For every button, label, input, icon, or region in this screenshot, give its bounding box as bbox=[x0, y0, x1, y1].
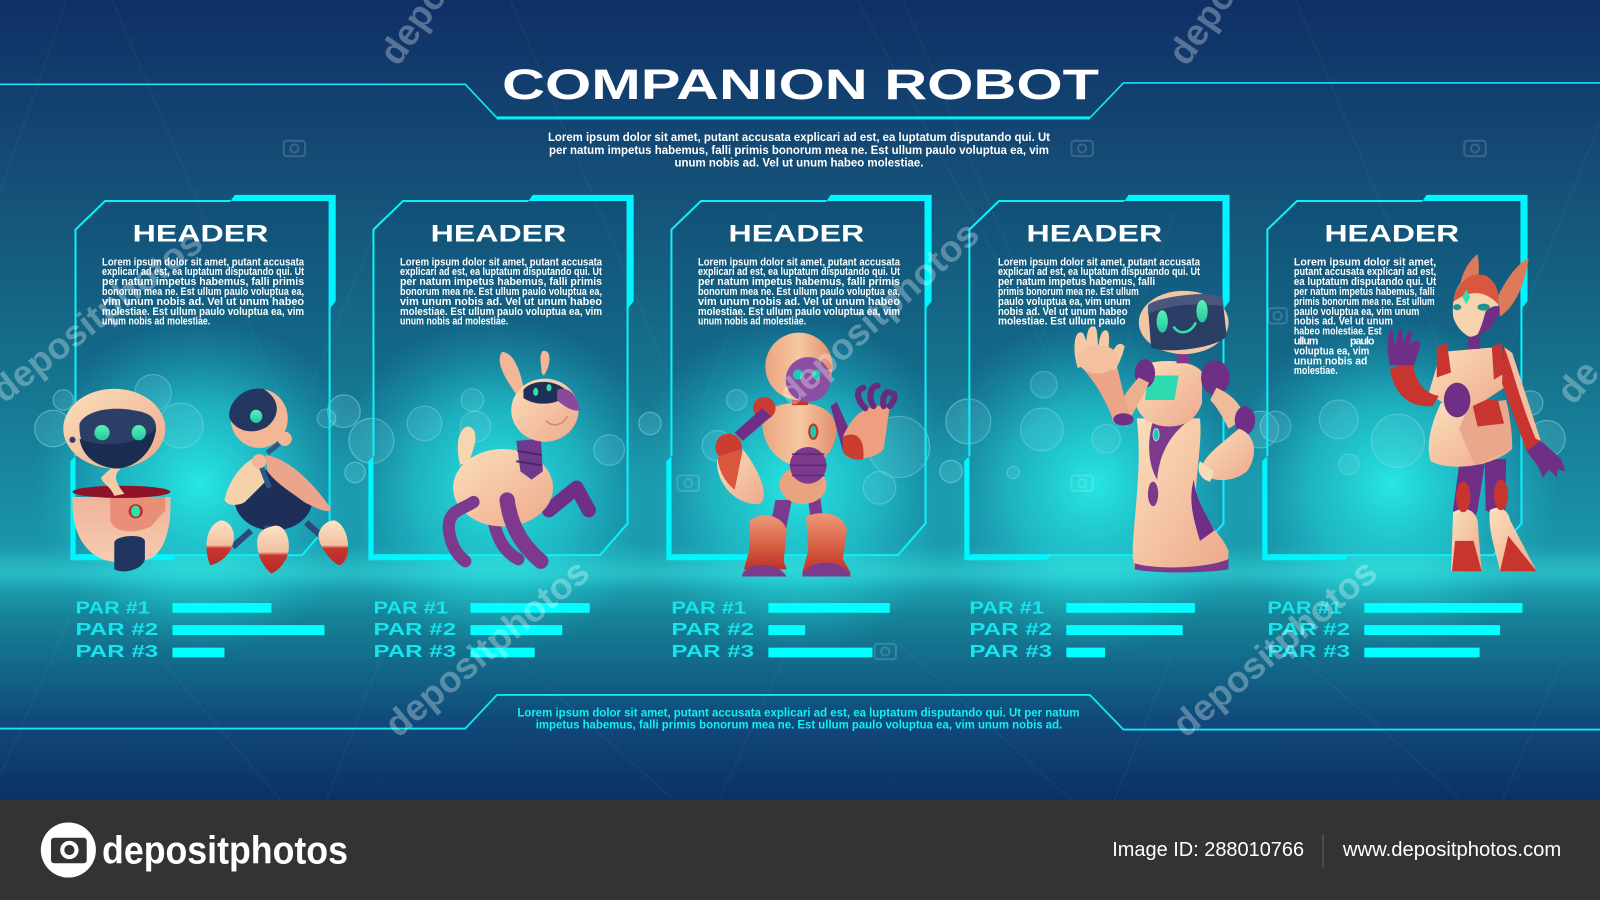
intro text: per natum impetus habemus, falli primis bonorum mea ne. Est ullum paulo voluptua ea, vim bbox=[549, 143, 1049, 157]
parameters 2: PAR #2 bbox=[373, 619, 456, 639]
bottom note bbox=[517, 705, 1080, 732]
bottom note: Lorem ipsum dolor sit amet, putant accusata explicari ad est, ea luptatum disputando qui. Ut per natum bbox=[517, 705, 1080, 719]
panel 2 text: explicari ad est, ea luptatum disputando qui. Ut bbox=[400, 266, 602, 278]
watermark camera icons bbox=[284, 141, 1486, 659]
panel 4 text: nobis ad. Vel ut unum habeo bbox=[998, 306, 1128, 318]
parameters 4 bbox=[969, 597, 1195, 661]
top frame line bbox=[0, 83, 1600, 118]
footer band bbox=[0, 800, 1600, 900]
robot 4: humanoid bbox=[715, 333, 895, 577]
panel 5 text: ea luptatum disputando qui. Ut bbox=[1294, 276, 1437, 288]
panel 5 heading: HEADER bbox=[1324, 220, 1460, 247]
panel 5 text: per natum impetus habemus, falli bbox=[1294, 286, 1435, 298]
bottom note: impetus habemus, falli primis bonorum mea ne. Est ullum paulo voluptua ea, vim unum nobis ad. bbox=[536, 718, 1062, 732]
panel 2 heading: HEADER bbox=[431, 220, 567, 247]
parameters 1 bbox=[76, 597, 324, 661]
parameters 2: PAR #3 bbox=[373, 641, 457, 661]
panel 2 text: per natum impetus habemus, falli primis bbox=[400, 276, 602, 288]
bottom frame line bbox=[0, 695, 1600, 730]
panel 1 text: Lorem ipsum dolor sit amet, putant accusata bbox=[102, 256, 304, 268]
panel 4 text bbox=[998, 256, 1200, 328]
panel 4 bbox=[964, 195, 1230, 560]
panel 5 bbox=[1262, 195, 1528, 560]
parameters 4: PAR #3 bbox=[969, 641, 1053, 661]
panel 3 bbox=[666, 195, 932, 560]
panel 4 heading: HEADER bbox=[1027, 220, 1163, 247]
website: www.depositphotos.com bbox=[1342, 839, 1561, 861]
parameters 3: PAR #2 bbox=[671, 619, 754, 639]
parameters 5: PAR #2 bbox=[1267, 619, 1350, 639]
panel 3 text bbox=[698, 256, 901, 328]
panel 2 text: molestiae. Est ullum paulo voluptua ea, vim bbox=[400, 306, 602, 318]
parameters 5: PAR #3 bbox=[1267, 641, 1350, 661]
intro text: Lorem ipsum dolor sit amet, putant accusata explicari ad est, ea luptatum disputando qui. Ut bbox=[548, 130, 1050, 144]
parameters 3: PAR #1 bbox=[671, 597, 746, 617]
parameters 2 bbox=[373, 597, 590, 661]
intro text: unum nobis ad. Vel ut unum habeo molestiae. bbox=[674, 155, 923, 169]
panel 4 text: explicari ad est, ea luptatum disputando qui. Ut bbox=[998, 266, 1200, 278]
panel 1 text: unum nobis ad molestiae. bbox=[102, 316, 210, 328]
parameters 5 bbox=[1267, 597, 1522, 661]
panel 3 text: molestiae. Est ullum paulo voluptua ea, vim bbox=[698, 306, 900, 318]
panel 4 text: molestiae. Est ullum paulo bbox=[998, 316, 1126, 328]
parameters 3 bbox=[671, 597, 890, 661]
watermarks: depositphotos bbox=[1165, 551, 1385, 745]
panel 5 text: putant accusata explicari ad est, bbox=[1294, 266, 1436, 278]
title: COMPANION ROBOT bbox=[502, 61, 1099, 109]
panel 2 text: Lorem ipsum dolor sit amet, putant accusata bbox=[400, 256, 602, 268]
panel 1 text: per natum impetus habemus, falli primis bbox=[102, 276, 304, 288]
panel 2 text bbox=[400, 256, 603, 328]
parameters 1: PAR #2 bbox=[76, 619, 158, 639]
panel 1 text: vim unum nobis ad. Vel ut unum habeo bbox=[102, 296, 305, 308]
footer logo icon bbox=[41, 822, 96, 878]
panel 5 text: Lorem ipsum dolor sit amet, bbox=[1294, 256, 1436, 268]
robot 3: dog bbox=[449, 351, 589, 561]
watermarks: depositphotos bbox=[377, 551, 597, 745]
robot 1: ball head on pot bbox=[63, 389, 171, 571]
panel 5 text bbox=[1294, 256, 1437, 377]
parameters 2: PAR #1 bbox=[373, 597, 448, 617]
panel 5 text: nobis ad. Vel ut unum bbox=[1294, 316, 1393, 328]
panel 3 heading: HEADER bbox=[729, 220, 865, 247]
robot 5: screen-face android bbox=[1076, 291, 1255, 572]
panel 1 text: explicari ad est, ea luptatum disputando qui. Ut bbox=[102, 266, 304, 278]
panel 3 text: per natum impetus habemus, falli primis bbox=[698, 276, 900, 288]
robot 6: feline android bbox=[1388, 254, 1565, 571]
panel 1 text bbox=[102, 256, 305, 328]
parameters 1: PAR #3 bbox=[76, 641, 159, 661]
panel 3 text: unum nobis ad molestiae. bbox=[698, 316, 806, 328]
panel 5 text: voluptua ea, vim bbox=[1294, 345, 1369, 357]
panel 3 text: explicari ad est, ea luptatum disputando qui. Ut bbox=[698, 266, 900, 278]
panel 4 text: paulo voluptua ea, vim unum bbox=[998, 296, 1131, 308]
parameters 5: PAR #1 bbox=[1267, 597, 1342, 617]
panel 4 text: primis bonorum mea ne. Est ullum bbox=[998, 286, 1139, 298]
panel 3 text: bonorum mea ne. Est ullum paulo voluptua ea, bbox=[698, 286, 900, 298]
panel 1 bbox=[70, 195, 336, 560]
image id: Image ID: 288010766 bbox=[1112, 839, 1304, 861]
panel 4 text: Lorem ipsum dolor sit amet, putant accusata bbox=[998, 256, 1200, 268]
panel 2 bbox=[368, 195, 634, 560]
intro text bbox=[548, 130, 1050, 169]
bubbles bbox=[35, 371, 1565, 504]
panel 5 text: ullum paulo bbox=[1294, 335, 1375, 347]
panel 2 text: bonorum mea ne. Est ullum paulo voluptua ea, bbox=[400, 286, 602, 298]
watermarks: depositphotos bbox=[770, 213, 987, 414]
panel 5 text: paulo voluptua ea, vim unum bbox=[1294, 306, 1419, 318]
footer brand: depositphotos bbox=[102, 829, 348, 872]
panel 5 text: molestiae. bbox=[1294, 365, 1338, 377]
parameters 4: PAR #1 bbox=[969, 597, 1044, 617]
panel 3 text: Lorem ipsum dolor sit amet, putant accusata bbox=[698, 256, 900, 268]
panel 4 text: per natum impetus habemus, falli bbox=[998, 276, 1155, 288]
panel 5 text: unum nobis ad bbox=[1294, 355, 1367, 367]
panel 1 text: bonorum mea ne. Est ullum paulo voluptua ea, bbox=[102, 286, 304, 298]
parameters 4: PAR #2 bbox=[969, 619, 1052, 639]
panel 2 text: unum nobis ad molestiae. bbox=[400, 316, 508, 328]
panel 3 text: vim unum nobis ad. Vel ut unum habeo bbox=[698, 296, 901, 308]
parameters 3: PAR #3 bbox=[671, 641, 755, 661]
panel 1 heading: HEADER bbox=[133, 220, 269, 247]
panel 2 text: vim unum nobis ad. Vel ut unum habeo bbox=[400, 296, 603, 308]
panel 5 text: primis bonorum mea ne. Est ullum bbox=[1294, 296, 1435, 308]
panel 5 text: habeo molestiae. Est bbox=[1294, 326, 1382, 338]
parameters 1: PAR #1 bbox=[76, 597, 150, 617]
panel 1 text: molestiae. Est ullum paulo voluptua ea, vim bbox=[102, 306, 304, 318]
robot 2: spider bot bbox=[206, 388, 348, 573]
